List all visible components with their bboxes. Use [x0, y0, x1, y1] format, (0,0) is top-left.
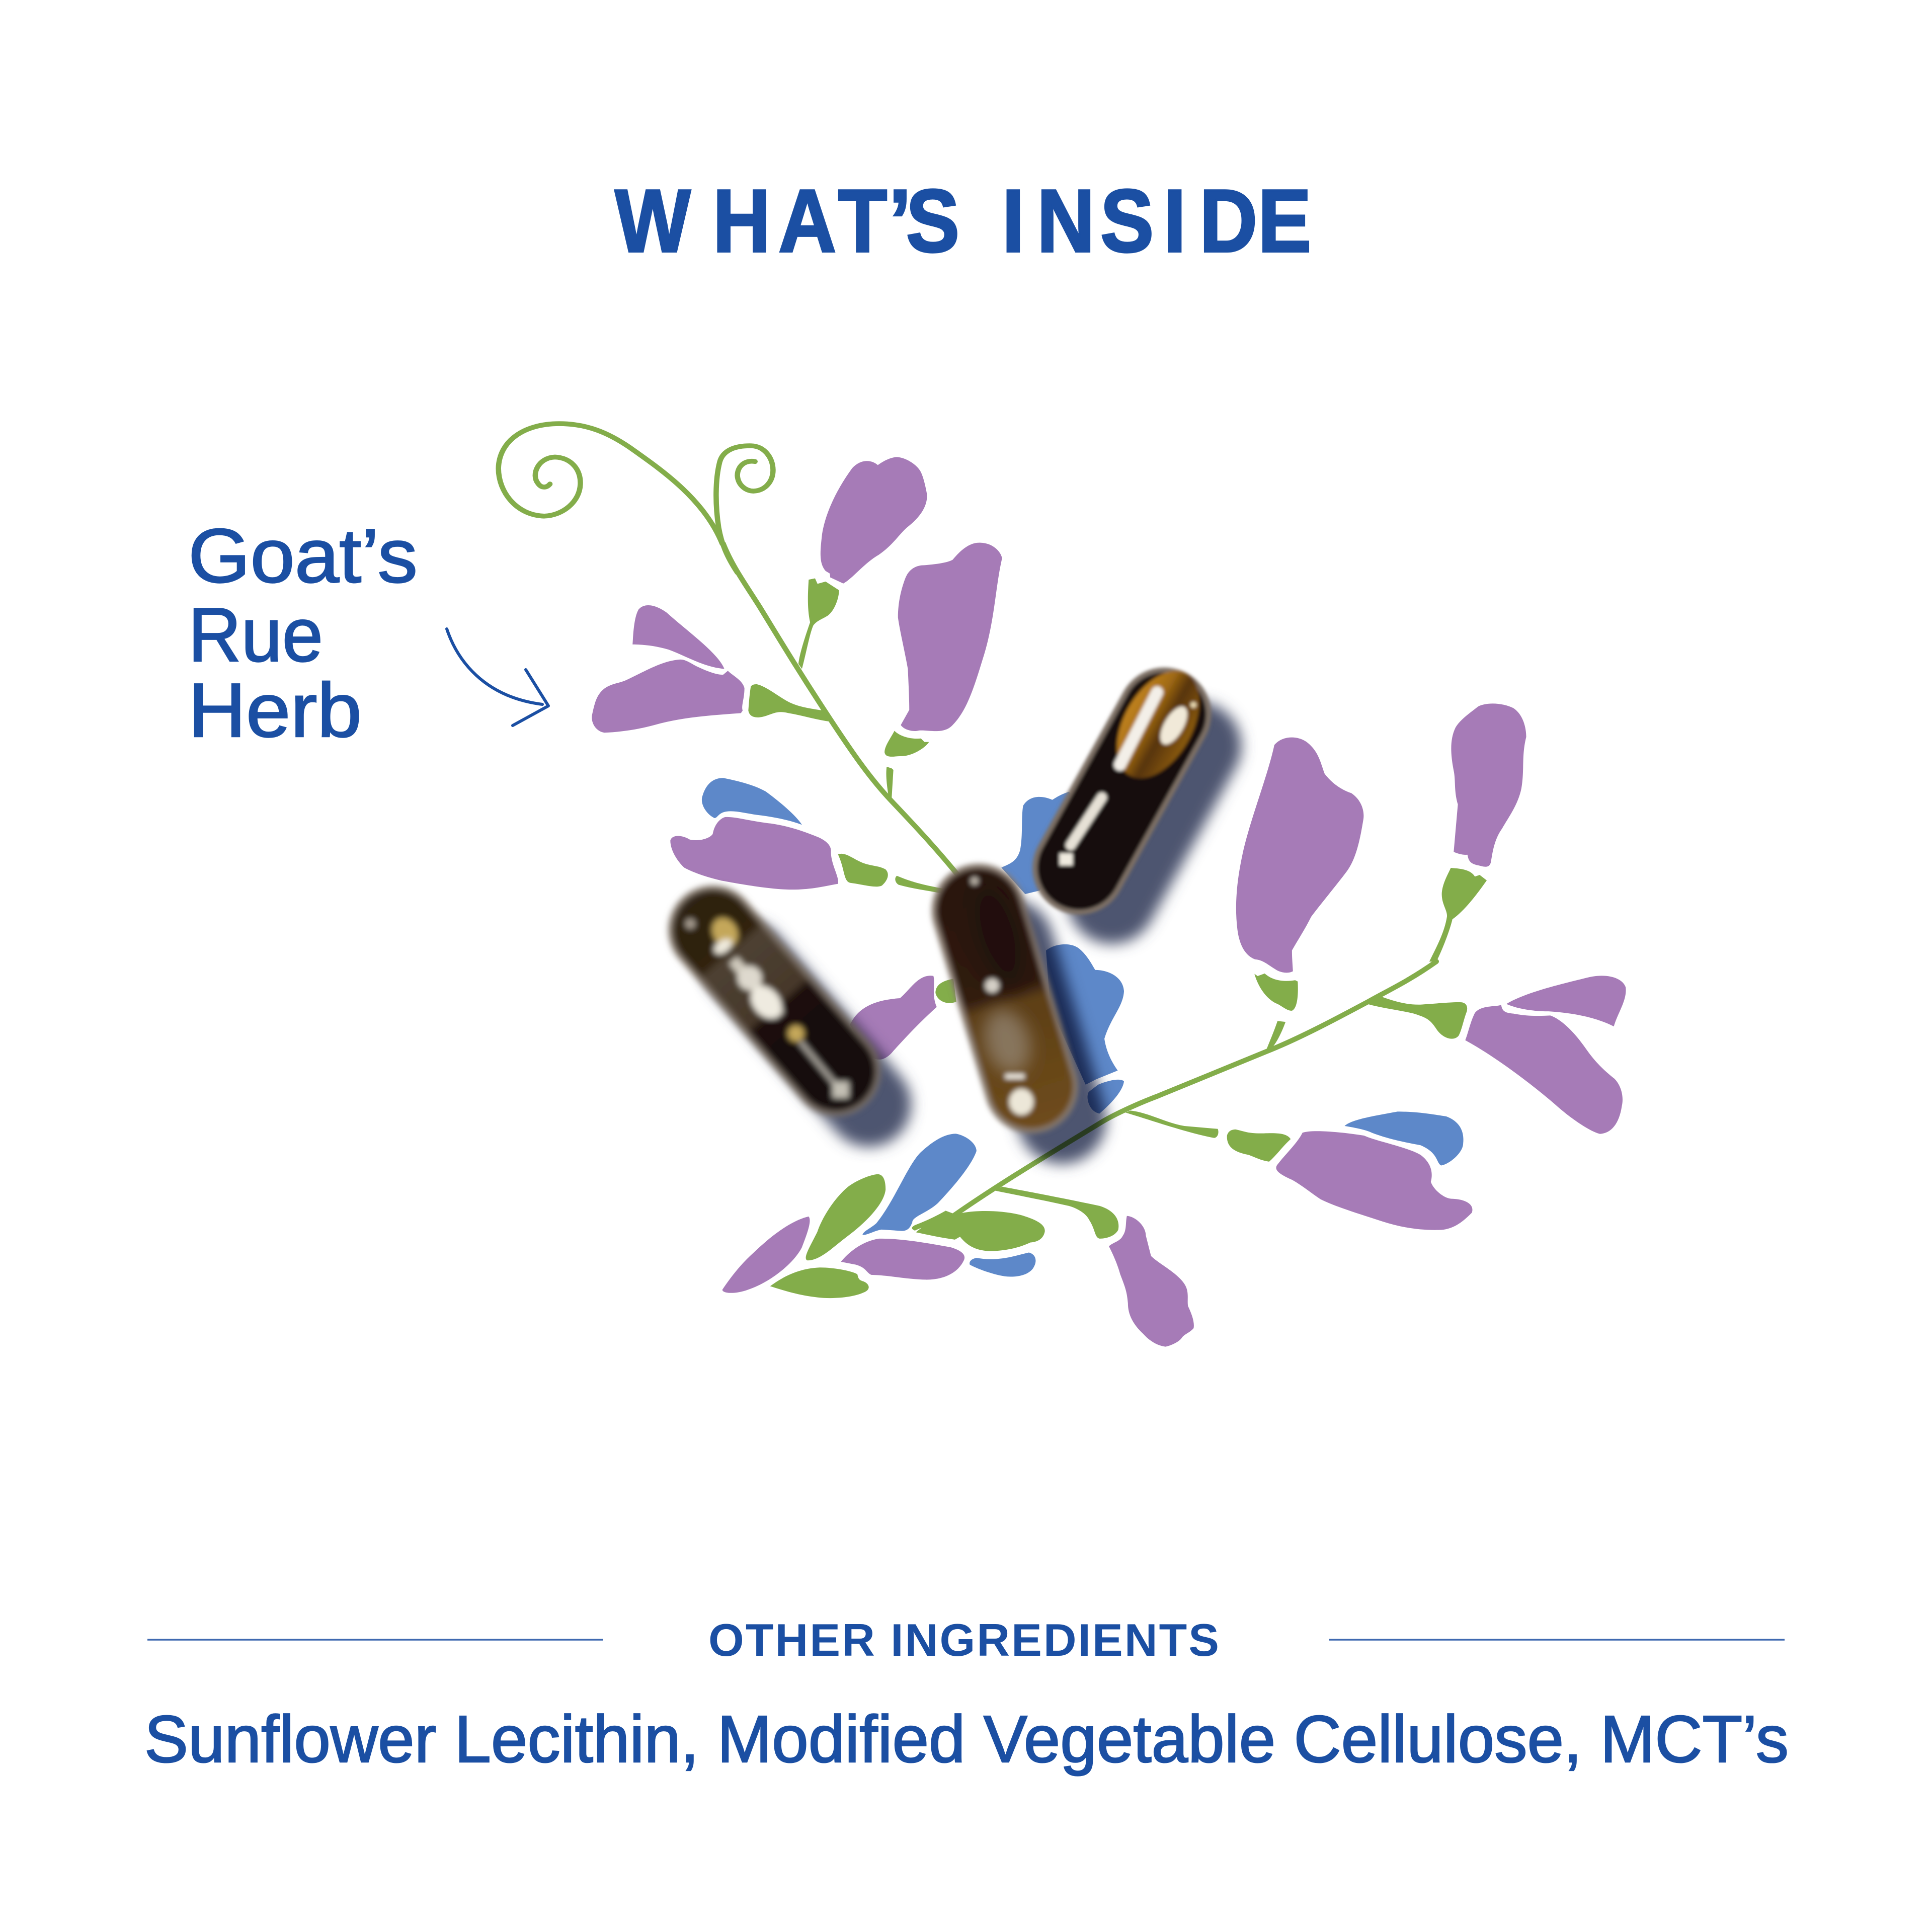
label: Goat's Rue Herb: Rue	[188, 592, 323, 678]
right branch flowers	[1236, 703, 1626, 1134]
capsule: left	[653, 870, 896, 1131]
illustration: goat's rue plant	[499, 424, 1626, 1347]
capsule: center	[923, 855, 1086, 1142]
other ingredients heading with rules: OTHER INGREDIENTS	[708, 1615, 1219, 1666]
petals behind capsules	[850, 792, 1124, 1113]
arrow	[447, 629, 548, 726]
label: Goat's Rue Herb: Goat’s	[188, 513, 418, 599]
other ingredients list: Sunflower Lecithin, Modified Vegetable Cellulose, MCT’s	[144, 1702, 1789, 1776]
label: Goat's Rue Herb: Herb	[188, 668, 362, 753]
upper stem and tendrils	[499, 424, 965, 884]
title: WHAT’S INSIDE	[615, 171, 1311, 271]
label: Goat's Rue Herb	[188, 513, 418, 753]
lower branch flowers and leaves	[722, 1110, 1472, 1347]
upper branch flowers	[592, 457, 1002, 894]
lower stem	[951, 961, 1436, 1218]
capsule: right	[1019, 654, 1225, 928]
capsule shadows	[686, 686, 1257, 1175]
